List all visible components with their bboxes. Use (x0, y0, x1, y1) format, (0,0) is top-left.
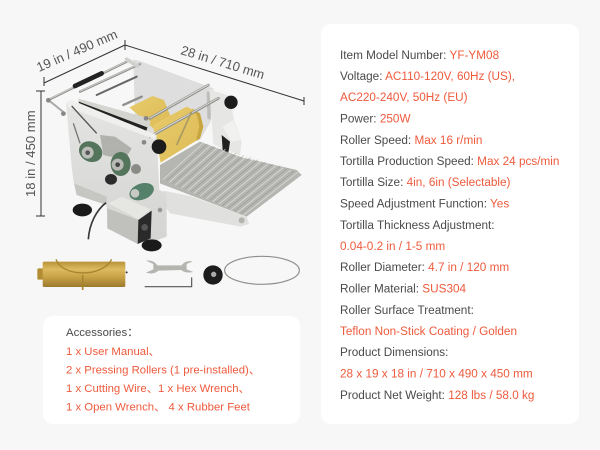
spec: roller diameter: Roller Diameter: 4.7 in / 120 mm (340, 261, 509, 274)
spec: tortilla size: Tortilla Size: 4in, 6in (Selectable) (340, 176, 511, 189)
accessory line 4: 1 x Open Wrench、 4 x Rubber Feet (66, 402, 251, 414)
spec: roller material: Roller Material: SUS304 (340, 282, 467, 296)
spec: voltage EU: AC220-240V, 50Hz (EU) (340, 91, 468, 104)
golden roller (37, 259, 128, 290)
spec: voltage: Voltage: AC110-120V, 60Hz (US), (340, 70, 515, 83)
accessories heading: Accessories： (66, 327, 138, 339)
spec: speed adjustment: Speed Adjustment Function: Yes (340, 198, 509, 210)
dimension: length: 28 in / 710 mm (179, 43, 266, 82)
open wrench (146, 261, 193, 273)
bearings (73, 123, 162, 212)
knobs (152, 96, 238, 154)
dimension: width: 19 in / 490 mm (34, 26, 120, 75)
belt (160, 142, 302, 217)
front yellow roller (153, 107, 203, 163)
control box (107, 197, 152, 244)
spec: power: Power: 250W (340, 112, 411, 126)
hex wrench (145, 277, 192, 287)
spec: surface treatment value: Teflon Non-Stick Coating / Golden (340, 325, 517, 338)
right side plate (209, 89, 242, 155)
spec: dimensions label: Product Dimensions: (340, 346, 448, 359)
spec: thickness adjustment label: Tortilla Thickness Adjustment: (340, 219, 495, 232)
dimension: length (125, 43, 304, 105)
rear frame panel (133, 59, 213, 153)
spec: surface treatment label: Roller Surface Treatment: (340, 304, 474, 317)
accessories illustrations (37, 256, 299, 290)
left side plate (66, 103, 167, 244)
spec: dimensions value: 28 x 19 x 18 in / 710 x 490 x 450 mm (340, 368, 533, 380)
scraper blade (46, 98, 192, 145)
power cord (88, 203, 106, 239)
machine illustration (46, 59, 302, 251)
accessory line 1: 1 x User Manual、 (66, 346, 160, 358)
rear yellow roller (129, 96, 171, 128)
spec: production speed: Tortilla Production Speed: Max 24 pcs/min (340, 155, 559, 168)
panel: accessories (43, 316, 300, 424)
rubber feet (73, 204, 162, 251)
spec: thickness adjustment value: 0.04-0.2 in / 1-5 mm (340, 240, 445, 253)
panel: specifications (321, 24, 579, 424)
dimension: height (23, 91, 45, 216)
cutting wire (225, 256, 299, 284)
accessory line 2: 2 x Pressing Rollers (1 pre-installed)、 (66, 364, 260, 376)
plate lower shade (74, 183, 107, 205)
dimension: height: 18 in / 450 mm (23, 110, 38, 197)
spec: roller speed: Roller Speed: Max 16 r/min (340, 134, 482, 147)
rubber foot (203, 265, 223, 285)
accessory line 3: 1 x Cutting Wire、1 x Hex Wrench、 (66, 383, 250, 395)
black handle (75, 73, 102, 86)
top bars (48, 59, 218, 137)
spec: net weight: Product Net Weight: 128 lbs / 58.0 kg (340, 389, 534, 402)
belt side arm (162, 191, 249, 227)
spec: item model number: Item Model Number: YF-YM08 (340, 49, 500, 62)
